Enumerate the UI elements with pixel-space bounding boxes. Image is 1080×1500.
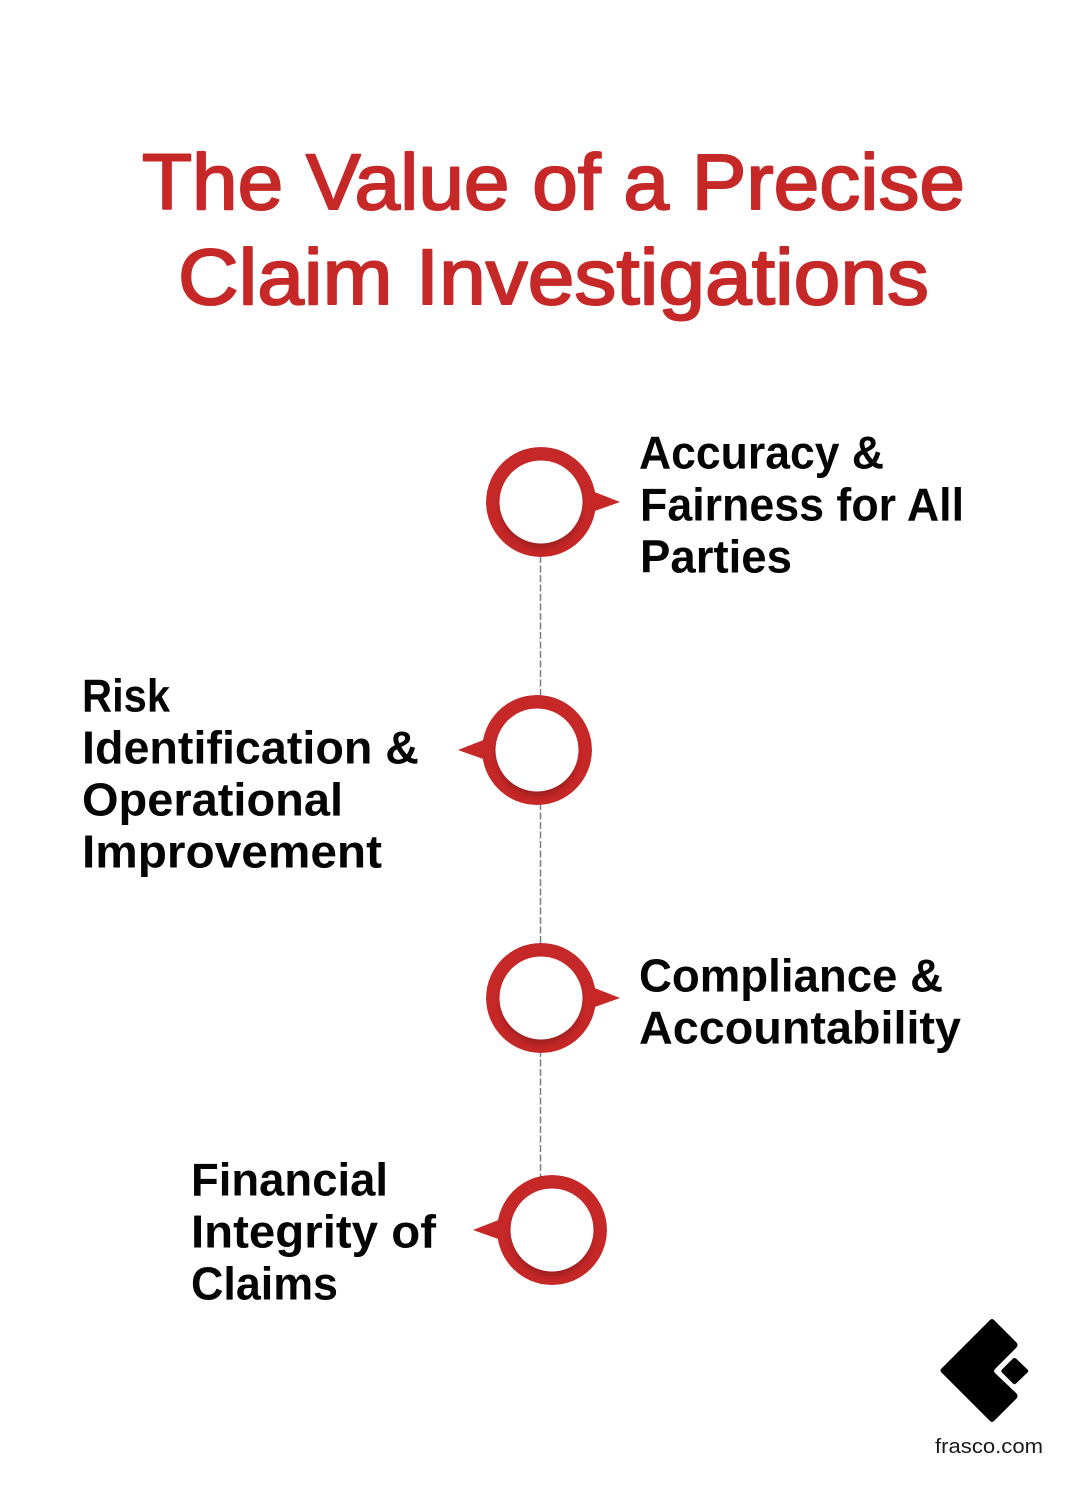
title: [142, 137, 965, 321]
text: compliance: [639, 950, 961, 1054]
text: accuracy and fairness: Accuracy &: [639, 426, 884, 478]
logo: frasco: [935, 1319, 1043, 1458]
text: financial integrity: [191, 1154, 437, 1310]
text: risk identification: Operational: [82, 774, 343, 826]
timeline marker 4: [473, 1175, 607, 1285]
text: accuracy and fairness: Fairness for All: [640, 478, 964, 530]
timeline connector line: [540, 556, 542, 1284]
text: financial integrity: Integrity of: [191, 1206, 437, 1258]
logo: frasco: frasco.com: [935, 1435, 1043, 1458]
title: The Value of a Precise: [142, 137, 965, 226]
text: accuracy and fairness: Parties: [640, 530, 792, 582]
timeline marker 2: [458, 695, 592, 805]
text: compliance: Compliance &: [639, 950, 943, 1002]
title: Claim Investigations: [178, 232, 929, 321]
text: financial integrity: Financial: [191, 1154, 388, 1206]
timeline marker 3: [486, 943, 620, 1053]
text: compliance: Accountability: [639, 1002, 961, 1054]
text: risk identification: Risk: [82, 670, 170, 722]
text: risk identification: Improvement: [82, 826, 382, 878]
timeline marker 1: [486, 447, 620, 557]
text: risk identification: [82, 670, 419, 878]
text: accuracy and fairness: [639, 426, 964, 582]
text: financial integrity: Claims: [191, 1258, 338, 1310]
text: risk identification: Identification &: [82, 722, 419, 774]
